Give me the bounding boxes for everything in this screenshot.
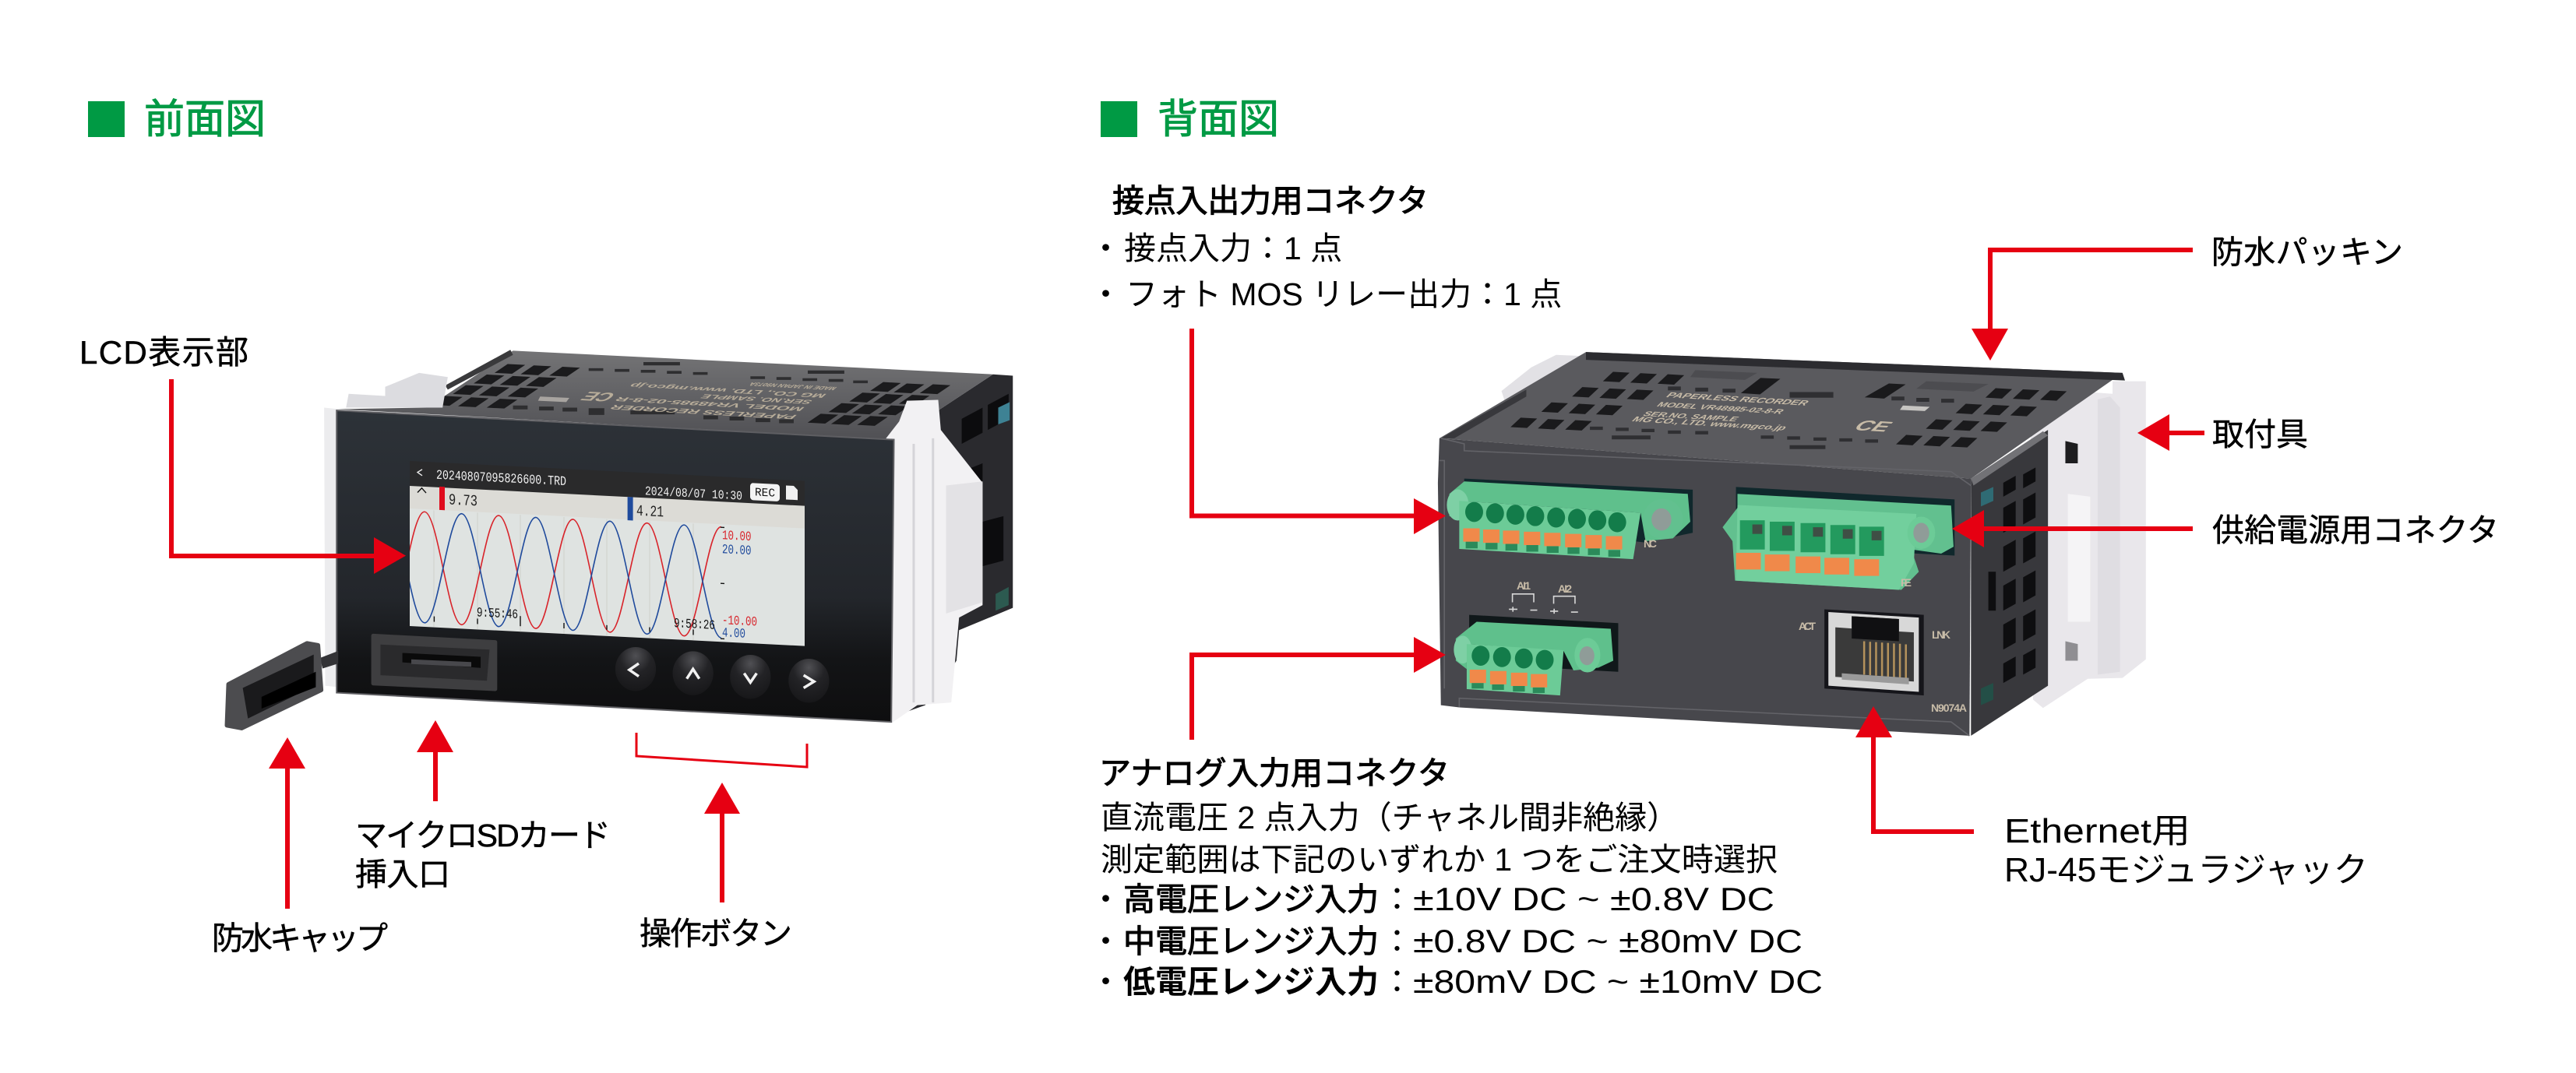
rear face lips and notches	[1440, 438, 1971, 736]
rear panel markings: NC	[1644, 537, 1657, 550]
white mounting bracket: right	[2031, 382, 2146, 708]
LCD readings and labels: 9:55:46	[477, 606, 518, 623]
rear panel markings: AI2	[1558, 582, 1572, 595]
label: waterproof packing with arrow: 防水パッキン	[2211, 234, 2403, 270]
AI terminal marking	[1509, 594, 1578, 614]
label: contact I/O connector text and arrow: 接点入出力用コネクタ	[1112, 183, 1429, 219]
heading: rear view: 背面図	[1158, 97, 1279, 142]
label: analog input connector text and arrow: ±10V DC ~ ±0.8V DC	[1413, 881, 1774, 917]
label: analog input connector text and arrow: ±0.8V DC ~ ±80mV DC	[1413, 923, 1802, 959]
infographic: front and rear views of the recorder	[82, 98, 2496, 997]
label: analog input connector text and arrow: ：	[1381, 923, 1413, 959]
label: contact I/O connector text and arrow: フォト MOS リレー出力：1 点	[1126, 276, 1562, 312]
label: mounting bracket with arrow: 取付具	[2212, 417, 2308, 452]
label: mounting bracket with arrow	[2137, 414, 2308, 452]
rear panel markings: LNK	[1932, 628, 1951, 641]
waterproof cap	[227, 643, 338, 728]
LCD readings and labels: -10.00	[722, 614, 757, 631]
top-plate printed text (front view)	[576, 381, 839, 420]
top-plate printed text (front view): PAPERLESS RECORDER	[608, 403, 799, 420]
heading: front view: 前面図	[144, 97, 266, 142]
label: contact I/O connector text and arrow	[1090, 183, 1562, 534]
LCD readings and labels: 9.73	[449, 492, 477, 511]
label: analog input connector text and arrow: ・	[1090, 964, 1122, 1000]
top-plate printed text (rear view)	[1630, 391, 1898, 434]
rear panel markings: AI1	[1517, 579, 1531, 592]
LCD readings and labels: 10.00	[722, 529, 751, 545]
RJ-45 modular jack	[1824, 609, 1924, 695]
label: micro SD insertion slot with arrow	[355, 720, 611, 892]
LCD readings and labels: 20240807095826600.TRD	[436, 469, 566, 490]
top-plate printed text (front view): MADE IN JAPAN N9073A	[747, 381, 839, 391]
LCD readings and labels: 4.00	[722, 626, 745, 642]
operation buttons	[615, 647, 829, 702]
panel: front view	[79, 97, 1013, 956]
contact input/output connector (8-pole)	[1447, 479, 1693, 559]
top of housing with vents	[1440, 352, 2125, 486]
label: analog input connector text and arrow: 直流電圧 2 点入力（チャネル間非絶縁）	[1101, 800, 1679, 836]
label: LCD display with arrow: LCD表示部	[79, 334, 248, 371]
label: waterproof cap with arrow	[212, 737, 388, 956]
analog input connector (4-pole)	[1454, 615, 1618, 695]
label: micro SD insertion slot with arrow: 挿入口	[355, 857, 450, 892]
label: LCD display with arrow	[79, 334, 406, 574]
top-plate printed text (front view): CE	[576, 389, 620, 404]
heading: rear view	[1101, 97, 1279, 142]
right side of housing	[1971, 430, 2048, 736]
top-plate printed text (rear view): SER.NO. SAMPLE	[1640, 410, 1742, 423]
label: analog input connector text and arrow: ・	[1090, 923, 1122, 959]
top-plate printed text (rear view): CE	[1849, 417, 1898, 434]
LCD readings and labels: 9:58:26	[674, 617, 715, 634]
rear panel markings: ACT	[1799, 620, 1816, 632]
label: analog input connector text and arrow: 高電圧レンジ入力	[1123, 881, 1379, 917]
red trace	[387, 510, 721, 638]
label: analog input connector text and arrow: ：	[1381, 881, 1413, 917]
label: contact I/O connector text and arrow: ・	[1090, 276, 1122, 312]
front face	[337, 410, 894, 722]
label: waterproof cap with arrow: 防水キャップ	[212, 920, 388, 956]
rear panel markings: FE	[1901, 576, 1912, 589]
LCD readings and labels: 2024/08/07 10:30	[645, 484, 742, 504]
label: Ethernet jack with arrow: Ethernet用	[2004, 812, 2190, 850]
white mounting bracket: left	[1502, 355, 1587, 406]
top-plate printed text (rear view): PAPERLESS RECORDER	[1664, 391, 1812, 407]
top-plate printed text (rear view): MODEL VR48985-02-8-R	[1654, 400, 1787, 416]
micro SD slot	[373, 635, 495, 689]
photo: device rear	[1438, 352, 2146, 736]
label: power connector with arrow: 供給電源用コネクタ	[2212, 512, 2499, 548]
label: analog input connector text and arrow: 低電圧レンジ入力	[1123, 964, 1379, 1000]
LCD readings and labels	[418, 466, 798, 645]
top-plate printed text (front view): SER.NO. SAMPLE	[699, 392, 815, 405]
label: analog input connector text and arrow: 中電圧レンジ入力	[1123, 923, 1379, 959]
LCD readings and labels: 20.00	[722, 543, 751, 559]
label: contact I/O connector text and arrow: ・	[1090, 230, 1122, 266]
power supply connector (5-pole)	[1722, 487, 1954, 589]
right side of housing	[894, 375, 1013, 716]
label: analog input connector text and arrow: アナログ入力用コネクタ	[1099, 755, 1450, 791]
label: power connector with arrow	[1952, 510, 2499, 548]
label: Ethernet jack with arrow	[1855, 706, 2368, 889]
heading: front view	[88, 97, 266, 142]
photo: device front	[227, 350, 1013, 728]
LCD screen	[387, 460, 805, 646]
panel: rear view	[1090, 97, 2499, 1000]
label: Ethernet jack with arrow: RJ-45モジュラジャック	[2004, 851, 2368, 889]
label: analog input connector text and arrow: ：	[1381, 964, 1413, 1000]
LCD readings and labels: 4.21	[636, 503, 664, 522]
top-plate printed text (front view): MODEL VR48985-02-8-R	[612, 396, 807, 412]
label: micro SD insertion slot with arrow: マイクロSDカード	[355, 818, 611, 853]
top-plate printed text (front view): MG CO., LTD. www.mgco.jp	[627, 382, 829, 399]
label: analog input connector text and arrow: ±80mV DC ~ ±10mV DC	[1413, 963, 1823, 1000]
white mounting bracket: right	[886, 400, 982, 723]
rear face	[1438, 438, 1971, 736]
white mounting bracket: left	[324, 373, 448, 687]
rear panel markings: N9074A	[1931, 702, 1967, 714]
top-plate printed text (rear view): MG CO., LTD. www.mgco.jp	[1630, 415, 1790, 432]
label: contact I/O connector text and arrow: 接点入力：1 点	[1124, 230, 1342, 266]
LCD readings and labels: REC	[755, 486, 775, 501]
label: operation buttons with bracket and arrow	[636, 733, 807, 952]
top of housing with vents	[337, 350, 993, 440]
label: operation buttons with bracket and arrow: 操作ボタン	[640, 916, 792, 952]
label: analog input connector text and arrow: 測定範囲は下記のいずれか 1 つをご注文時選択	[1101, 842, 1778, 878]
blue trace	[387, 510, 721, 638]
label: analog input connector text and arrow: ・	[1090, 881, 1122, 917]
rear panel markings	[1517, 537, 1967, 714]
label: analog input connector text and arrow	[1090, 637, 1823, 1000]
label: waterproof packing with arrow	[1972, 234, 2403, 361]
